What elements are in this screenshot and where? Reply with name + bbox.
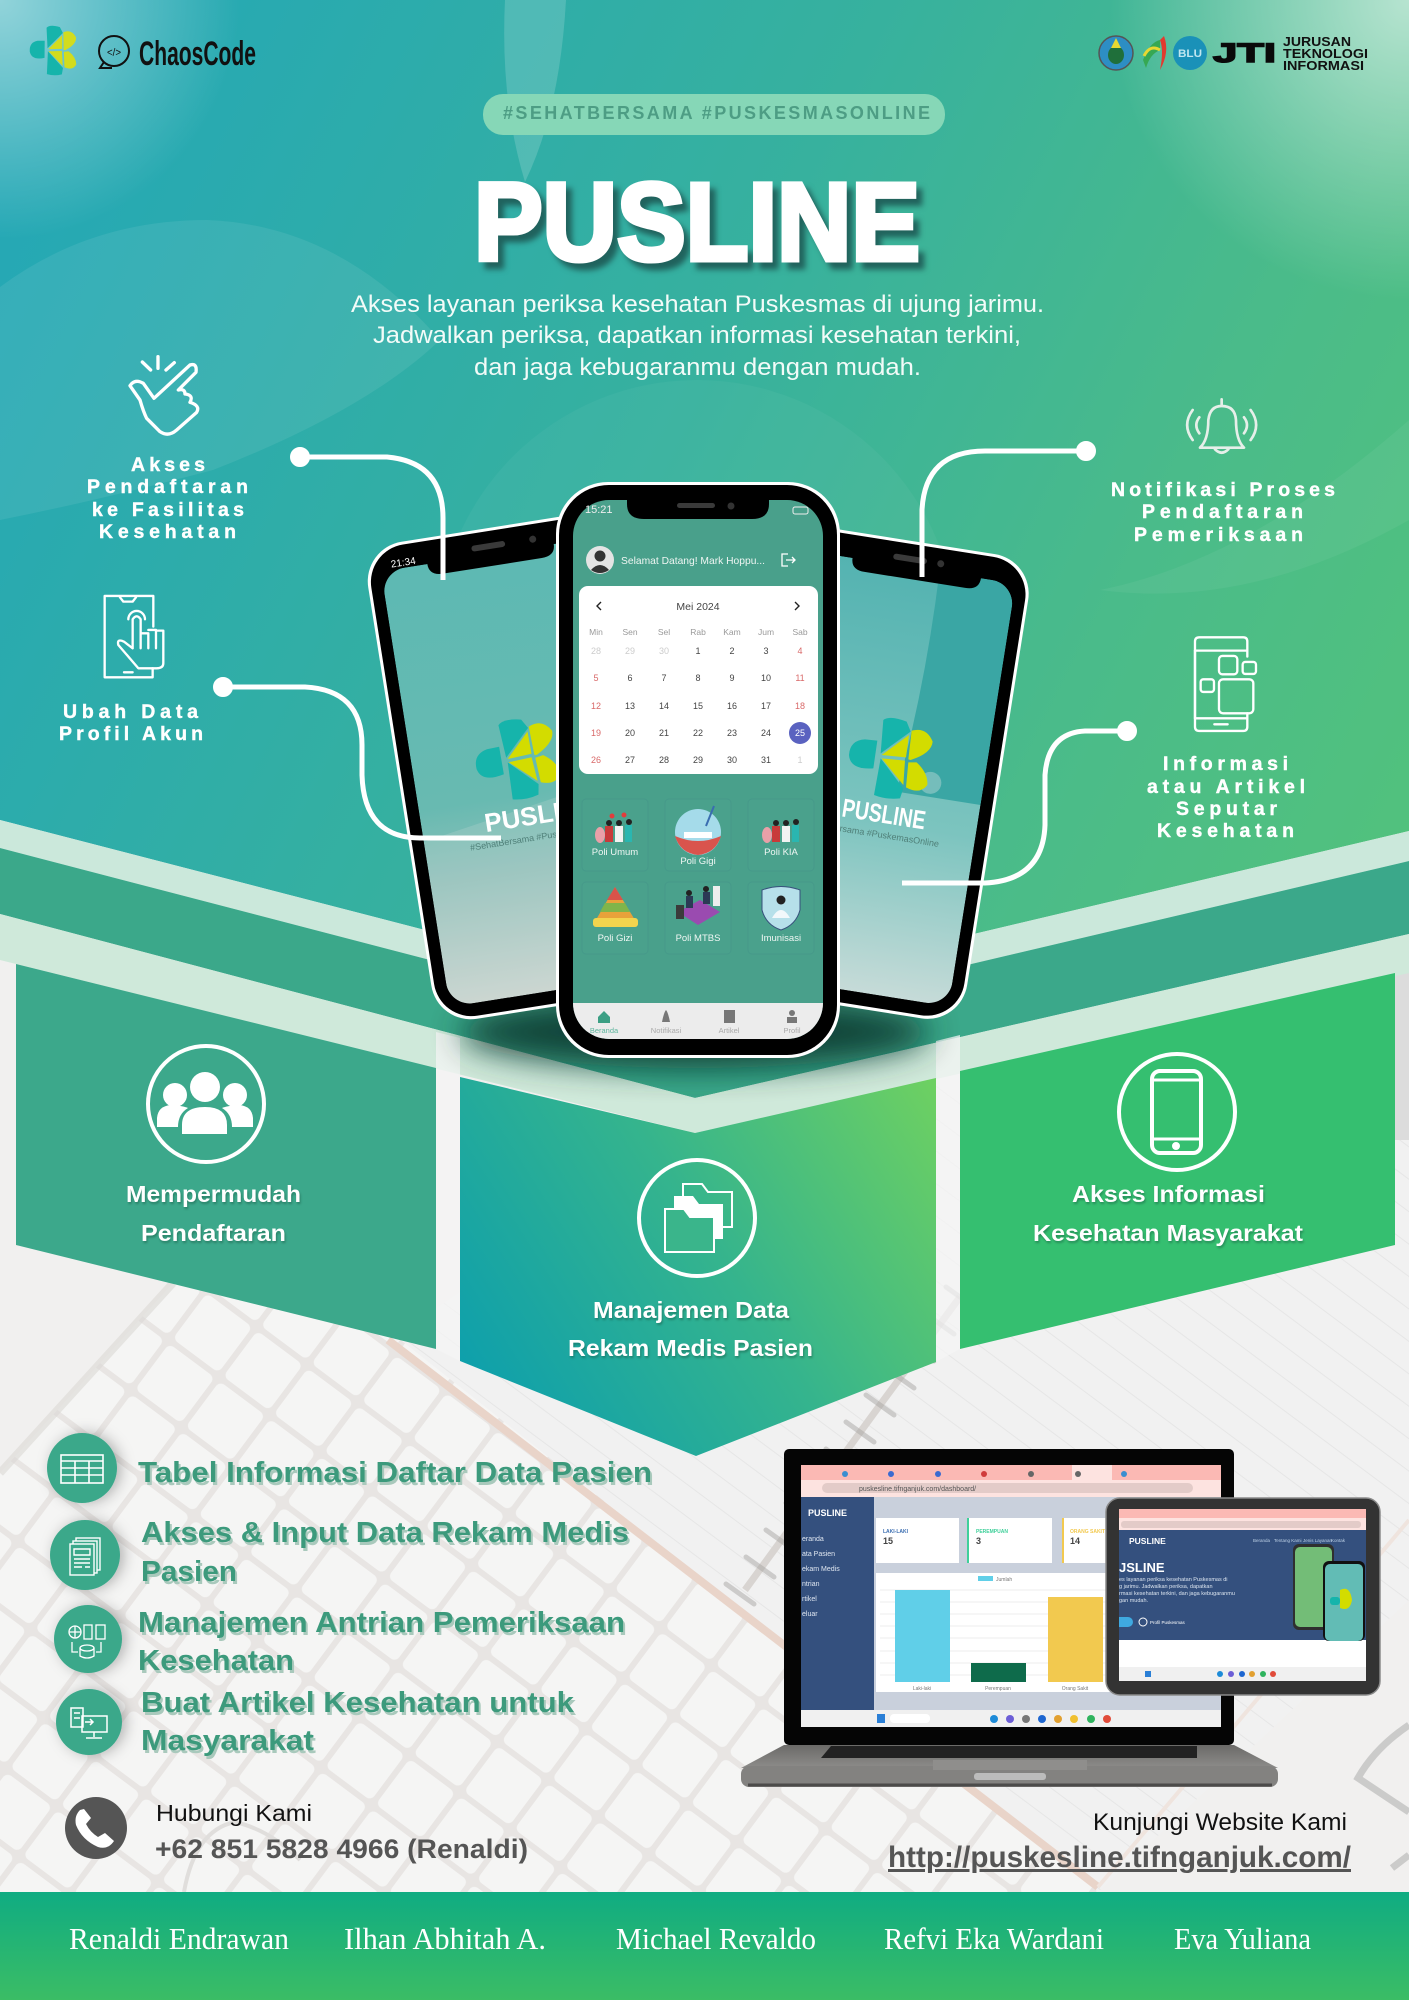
calendar — [579, 586, 818, 774]
label: Pendaftaran — [141, 1220, 286, 1246]
icon: poli kia — [762, 819, 799, 843]
bullet: akses input rekam medis: Pasien — [141, 1556, 237, 1588]
contact: phone — [65, 1797, 528, 1864]
glasses at the right edge — [1358, 1725, 1409, 1868]
hashtag pill: #SEHATBERSAMA #PUSKESMASONLINE — [503, 103, 930, 123]
notebook pink edge — [388, 1340, 1098, 1887]
calendar: 29 — [693, 755, 703, 765]
label — [1111, 479, 1335, 546]
tablet mockup: g jarimu. Jadwalkan periksa, dapatkan — [1119, 1584, 1213, 1590]
calendar: Sel — [658, 627, 670, 637]
laptop mockup: PEREMPUAN — [976, 1529, 1008, 1535]
calendar: 6 — [627, 673, 633, 683]
service menu grid: Poli Gizi — [598, 933, 632, 944]
calendar: Kam — [723, 627, 741, 637]
laptop mockup: rtikel — [802, 1596, 817, 1603]
label: Pemeriksaan — [1134, 524, 1303, 546]
calendar: 16 — [727, 701, 737, 711]
label: Kesehatan — [99, 521, 236, 543]
calendar: Min — [589, 627, 603, 637]
right edge paper shadow — [1395, 970, 1409, 1140]
website link: http://puskesline.tifnganjuk.com/ — [888, 1841, 1352, 1874]
icon: poli gigi — [675, 806, 721, 855]
subtitle: dan jaga kebugaranmu dengan mudah. — [474, 354, 921, 381]
label: Rekam Medis Pasien — [568, 1335, 813, 1361]
label: Kesehatan Masyarakat — [1033, 1220, 1303, 1246]
calendar: 8 — [695, 673, 701, 683]
greeting header — [586, 546, 795, 574]
laptop mockup: 14 — [1070, 1536, 1080, 1546]
top gradient header with chevron edge — [0, 0, 1409, 1000]
notch — [627, 498, 769, 519]
calendar: 14 — [659, 701, 669, 711]
laptop mockup: ORANG SAKIT — [1070, 1529, 1105, 1535]
website link — [888, 1809, 1352, 1874]
laptop mockup — [741, 1449, 1278, 1787]
hump behind phones — [437, 380, 957, 900]
calendar: 2 — [729, 646, 735, 656]
feature: ubah data profil — [59, 596, 203, 745]
icon: poli gizi pyramid — [593, 887, 638, 927]
laptop mockup: eluar — [802, 1611, 818, 1618]
calendar: 1 — [695, 646, 701, 656]
tablet mockup: gan mudah. — [1119, 1598, 1149, 1604]
logos: campus and JTI: BLU — [1178, 48, 1202, 60]
greeting header: Selamat Datang! Mark Hoppu... — [621, 555, 765, 567]
phone right: splash screen: PUSLINE — [840, 793, 928, 835]
footer team names: Ilhan Abhitah A. — [344, 1921, 546, 1956]
laptop mockup: ekam Medis — [802, 1566, 840, 1573]
bullet: tabel informasi — [47, 1433, 652, 1503]
phone centre: app home screen: 15:21 — [585, 504, 613, 516]
subtitle: Jadwalkan periksa, dapatkan informasi kesehatan terkini, — [373, 322, 1021, 349]
icon: smartphone — [1119, 1054, 1235, 1170]
calendar: 31 — [761, 755, 771, 765]
calendar: 28 — [659, 755, 669, 765]
phone left: splash screen: #SehatBersama #PuskemasOnline — [469, 821, 609, 853]
label — [568, 1297, 813, 1361]
translucent blob shape left — [0, 220, 440, 520]
calendar: 30 — [727, 755, 737, 765]
calendar: 23 — [727, 728, 737, 738]
calendar: Rab — [690, 627, 706, 637]
laptop mockup: Orang Sakit — [1062, 1686, 1089, 1692]
phone left: splash screen: PUSLINE — [482, 791, 598, 838]
logos: campus and JTI: TEKNOLOGI — [1283, 47, 1368, 61]
calendar: 22 — [693, 728, 703, 738]
tablet mockup: Tentang Kami — [1274, 1538, 1302, 1543]
label: Pendaftaran — [87, 476, 248, 498]
logos: campus and JTI: JURUSAN — [1283, 35, 1351, 49]
calendar: 10 — [761, 673, 771, 683]
calendar: 17 — [761, 701, 771, 711]
icon: data flow — [69, 1625, 105, 1658]
phone right: splash screen: #SehatBersama #PuskemasOnline — [800, 817, 940, 849]
bullet: buat artikel: Masyarakat — [141, 1725, 314, 1757]
laptop mockup: 15 — [883, 1536, 893, 1546]
keyboard — [0, 1210, 1098, 1892]
calendar: Sen — [622, 627, 638, 637]
label: Profil Akun — [59, 723, 203, 745]
logos: campus and JTI: JTI — [1213, 38, 1276, 68]
label: Informasi — [1163, 753, 1288, 775]
connector: notifikasi — [922, 443, 1094, 577]
notebook spiral rings — [726, 1287, 974, 1604]
tablet mockup — [1105, 1498, 1380, 1695]
translucent streak centre — [504, 0, 566, 182]
logos: campus and JTI: INFORMASI — [1283, 59, 1364, 73]
calendar: 12 — [591, 701, 601, 711]
phone left: splash screen — [368, 516, 559, 1020]
footer team names: Michael Revaldo — [616, 1921, 816, 1956]
bullet: akses input rekam medis: Akses & Input Data Rekam Medis — [141, 1517, 629, 1549]
dashboard bar chart — [876, 1573, 1110, 1692]
icon: monitor with document — [71, 1708, 107, 1738]
phone right: splash screen — [840, 530, 1029, 1019]
label: Akses — [131, 454, 205, 476]
icon: finger tap — [130, 357, 198, 434]
laptop mockup: ata Pasien — [802, 1551, 835, 1558]
tablet mockup: es layanan periksa kesehatan Puskesmas di — [1119, 1577, 1228, 1583]
label — [1147, 753, 1305, 842]
dashboard stat cards — [876, 1518, 959, 1563]
calendar: Sab — [792, 627, 808, 637]
label — [87, 454, 248, 543]
tablet mockup: Jenis Layanan — [1303, 1538, 1333, 1543]
subtitle: Akses layanan periksa kesehatan Puskesmas di ujung jarimu. — [351, 291, 1044, 318]
notebook lined paper — [388, 960, 1409, 1892]
label: ke Fasilitas — [92, 499, 244, 521]
bottom navigation: Profil — [783, 1026, 801, 1035]
icon: folders — [639, 1160, 755, 1276]
calendar: 27 — [625, 755, 635, 765]
title: PUSLINE — [474, 161, 920, 284]
calendar: 28 — [591, 646, 601, 656]
label — [1033, 1181, 1303, 1246]
label: Manajemen Data — [593, 1297, 789, 1323]
icon: phone apps — [1195, 637, 1256, 731]
connector: ubah data — [215, 679, 501, 838]
tablet mockup: rmasi kesehatan terkini, dan jaga kebugaranmu — [1119, 1591, 1235, 1597]
hashtag pill — [483, 94, 945, 135]
calendar: 18 — [795, 701, 805, 711]
service menu grid: Poli Gigi — [680, 856, 716, 867]
chevron strip upper light — [0, 820, 1409, 1029]
connector: informasi — [902, 723, 1135, 883]
calendar: 15 — [693, 701, 703, 711]
calendar: 4 — [797, 646, 803, 656]
icon: touch phone — [105, 596, 163, 677]
tablet mockup: Beranda — [1253, 1538, 1271, 1543]
website link: Kunjungi Website Kami — [1093, 1809, 1347, 1836]
icon: poli umum — [595, 812, 632, 843]
calendar: 20 — [625, 728, 635, 738]
bottom navigation: Beranda — [590, 1026, 619, 1035]
laptop mockup: Perempuan — [985, 1686, 1011, 1692]
tablet mockup: Profil Puskesmas — [1150, 1620, 1186, 1625]
icon: documents — [70, 1538, 100, 1575]
feature: informasi artikel — [1147, 637, 1305, 842]
white gutters between panels — [436, 1032, 960, 1362]
label: Kesehatan — [1157, 820, 1294, 842]
calendar: Mei 2024 — [676, 601, 720, 613]
shadow under phones — [460, 996, 930, 1068]
label: Pendaftaran — [1142, 501, 1303, 523]
footer team names: Renaldi Endrawan — [69, 1921, 289, 1956]
bullet: buat artikel — [56, 1687, 575, 1757]
label — [59, 701, 203, 745]
icon: bell — [1187, 399, 1256, 453]
service menu grid: Imunisasi — [761, 933, 801, 944]
footer team names: Eva Yuliana — [1174, 1921, 1311, 1956]
calendar: 29 — [625, 646, 635, 656]
calendar: 25 — [795, 728, 805, 738]
logo: ChaosCode — [99, 35, 256, 73]
calendar: 11 — [795, 673, 805, 683]
chevron band dark green — [0, 848, 1409, 1098]
tablet mockup: PUSLINE — [1129, 1536, 1166, 1546]
tablet mockup: Kontak — [1331, 1538, 1346, 1543]
label: atau Artikel — [1147, 776, 1305, 798]
phone left: splash screen: 21:34 — [390, 556, 417, 571]
calendar: 13 — [625, 701, 635, 711]
calendar: 9 — [729, 673, 735, 683]
bottom navigation: Artikel — [719, 1026, 740, 1035]
label: Notifikasi Proses — [1111, 479, 1335, 501]
laptop mockup: Laki-laki — [913, 1686, 931, 1692]
calendar: 21 — [659, 728, 669, 738]
calendar: 5 — [593, 673, 599, 683]
wall fan — [918, 770, 943, 795]
label: Mempermudah — [126, 1181, 301, 1207]
label — [126, 1181, 301, 1246]
bottom navigation — [573, 1003, 823, 1039]
bullet: buat artikel: Buat Artikel Kesehatan untuk — [141, 1687, 575, 1719]
taskbar — [801, 1710, 1221, 1727]
connector: akses pendaftaran — [292, 449, 443, 580]
contact: phone: Hubungi Kami — [156, 1800, 312, 1826]
icon: telephone — [65, 1797, 127, 1859]
calendar: 26 — [591, 755, 601, 765]
contact: phone: +62 851 5828 4966 (Renaldi) — [155, 1834, 528, 1864]
logo on left phone — [465, 708, 570, 811]
bullet: manajemen antrian: Kesehatan — [138, 1645, 294, 1677]
chevron strip lower light — [0, 914, 1409, 1133]
laptop mockup: puskesline.tifnganjuk.com/dashboard/ — [859, 1486, 976, 1493]
icon: imunisasi — [762, 886, 800, 930]
calendar: Jum — [758, 627, 774, 637]
laptop mockup: LAKI-LAKI — [883, 1529, 909, 1535]
feature: akses pendaftaran — [87, 357, 248, 543]
footer team names: Refvi Eka Wardani — [884, 1921, 1104, 1956]
service menu grid: Poli MTBS — [676, 933, 720, 944]
logo on right phone — [849, 718, 933, 799]
label: Akses Informasi — [1072, 1181, 1265, 1207]
calendar: 1 — [797, 755, 803, 765]
service menu grid — [582, 799, 814, 954]
icon: table — [61, 1455, 103, 1483]
panel: manajemen data rekam medis — [460, 1077, 936, 1456]
laptop mockup: PUSLINE — [808, 1508, 847, 1518]
panel: mempermudah pendaftaran — [16, 964, 436, 1349]
bullet: manajemen antrian: Manajemen Antrian Pemeriksaan — [138, 1607, 625, 1639]
bullet: akses input rekam medis — [50, 1517, 629, 1590]
footer team names — [0, 1892, 1409, 2000]
service menu grid: Poli Umum — [592, 847, 638, 858]
label: Seputar — [1176, 798, 1277, 820]
laptop mockup: eranda — [802, 1536, 824, 1543]
tablet mockup: JSLINE — [1119, 1560, 1165, 1575]
mini phones — [1293, 1544, 1334, 1630]
service menu grid: Poli KIA — [764, 847, 799, 858]
logo: ChaosCode: </> — [107, 47, 121, 59]
mouse outline — [184, 1822, 300, 1892]
logos: campus and JTI — [1099, 35, 1368, 73]
label: Ubah Data — [63, 701, 198, 723]
calendar: 19 — [591, 728, 601, 738]
dashboard sidebar — [801, 1497, 874, 1710]
laptop mockup: ntrian — [802, 1581, 820, 1588]
logo: ChaosCode: ChaosCode — [139, 35, 256, 73]
icon: poli mtbs — [676, 886, 720, 925]
icon: people group — [148, 1046, 264, 1162]
subtitle — [351, 291, 1044, 381]
bullet: manajemen antrian — [54, 1605, 625, 1677]
calendar: 7 — [661, 673, 667, 683]
calendar: 3 — [763, 646, 769, 656]
bullet: tabel informasi: Tabel Informasi Daftar Data Pasien — [138, 1457, 652, 1489]
feature: notifikasi — [1111, 399, 1335, 546]
bottom navigation: Notifikasi — [651, 1026, 682, 1035]
panel: akses informasi kesehatan — [960, 973, 1395, 1349]
logo: health clover — [27, 23, 80, 78]
phone centre: app home screen — [556, 482, 840, 1058]
calendar: 30 — [659, 646, 669, 656]
laptop mockup: 3 — [976, 1536, 981, 1546]
laptop mockup: Jumlah — [996, 1577, 1012, 1583]
calendar: 24 — [761, 728, 771, 738]
